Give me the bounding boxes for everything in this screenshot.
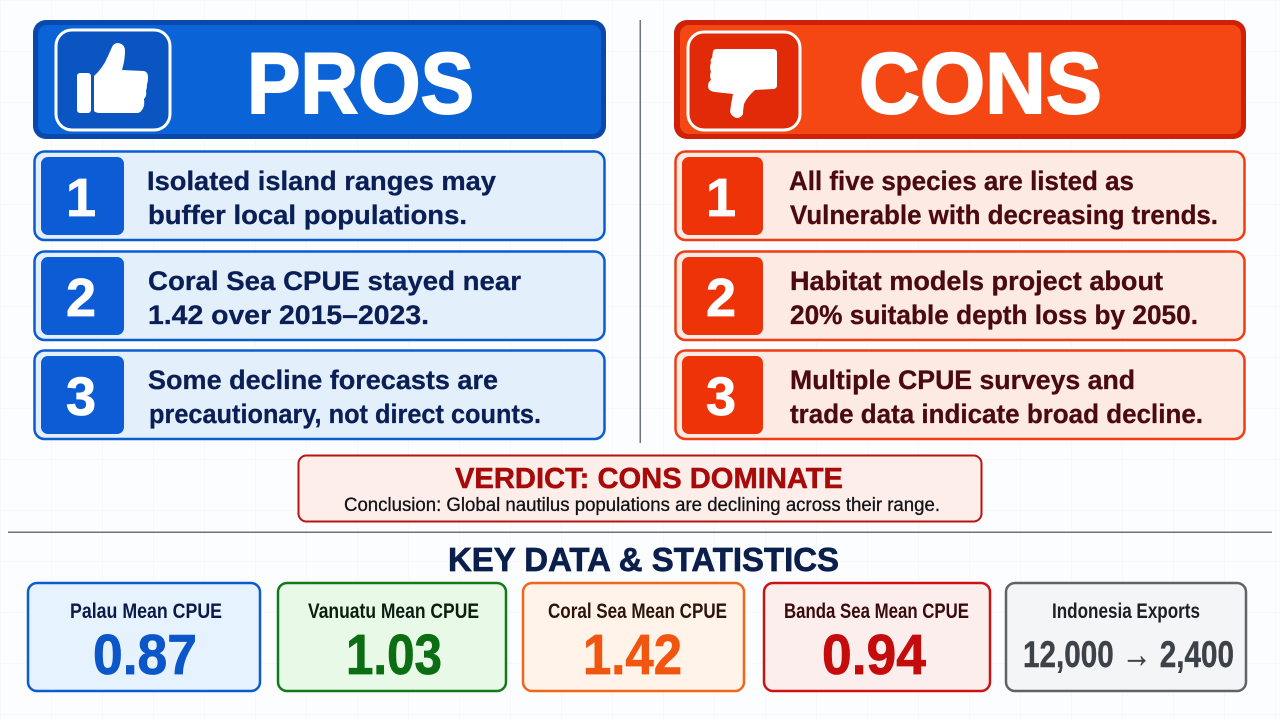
- callout: verdict: [298, 456, 982, 522]
- icon: thumbs up: [56, 30, 170, 130]
- con item 1: 1: [706, 168, 736, 228]
- section divider: [8, 532, 1272, 533]
- stat card: Coral Sea: 1.42: [583, 623, 682, 687]
- con item 2: [676, 252, 1244, 340]
- con item 1: All five species are listed as: [789, 166, 1134, 196]
- pro item 3: Some decline forecasts are: [148, 365, 498, 395]
- pro item 1: buffer local populations.: [148, 200, 467, 230]
- pro item 1: 1: [66, 168, 96, 228]
- pro item 2: Coral Sea CPUE stayed near: [148, 266, 521, 296]
- con item 3: Multiple CPUE surveys and: [790, 365, 1135, 395]
- stat card: Banda Sea: [764, 583, 990, 691]
- callout: verdict: VERDICT: CONS DOMINATE: [455, 463, 843, 495]
- callout: verdict: Conclusion: Global nautilus populations are declining across their range.: [344, 495, 940, 516]
- pro item 1: [34, 152, 604, 240]
- pro item 3: 3: [66, 367, 96, 427]
- icon: thumbs down: [688, 32, 800, 130]
- con item 1: [676, 152, 1244, 240]
- stat card: Banda Sea: 0.94: [822, 623, 926, 687]
- pro item 2: [34, 252, 604, 340]
- heading: cons: CONS: [859, 36, 1102, 132]
- stat card: Indonesia exports: 12,000 → 2,400: [1023, 634, 1234, 675]
- con item 3: trade data indicate broad decline.: [790, 399, 1203, 429]
- con item 2: 2: [706, 268, 736, 328]
- panel: cons header: [674, 20, 1246, 139]
- stat card: Banda Sea: Banda Sea Mean CPUE: [784, 600, 969, 623]
- stat card: Coral Sea: Coral Sea Mean CPUE: [548, 600, 727, 623]
- heading: key data and statistics: KEY DATA & STATISTICS: [448, 541, 839, 578]
- pro item 3: precautionary, not direct counts.: [149, 399, 541, 429]
- con item 2: Habitat models project about: [790, 266, 1163, 296]
- stat card: Indonesia exports: [1006, 583, 1246, 691]
- stat card: Palau: 0.87: [93, 623, 197, 687]
- pro item 2: 1.42 over 2015–2023.: [148, 300, 429, 330]
- pro item 3: [34, 350, 604, 439]
- con item 3: [676, 350, 1244, 439]
- con item 3: 3: [706, 367, 736, 427]
- stat card: Coral Sea: [523, 583, 744, 691]
- pro item 2: 2: [66, 268, 96, 328]
- con item 2: 20% suitable depth loss by 2050.: [790, 300, 1198, 330]
- stat card: Vanuatu: Vanuatu Mean CPUE: [308, 600, 479, 623]
- stat card: Indonesia exports: Indonesia Exports: [1052, 600, 1200, 623]
- stat card: Palau: Palau Mean CPUE: [70, 600, 222, 623]
- stat card: Vanuatu: [278, 583, 506, 691]
- stat card: Palau: [28, 583, 260, 691]
- con item 1: Vulnerable with decreasing trends.: [790, 200, 1218, 230]
- pro item 1: Isolated island ranges may: [147, 166, 496, 196]
- stat card: Vanuatu: 1.03: [346, 623, 442, 687]
- panel: pros header: [33, 20, 606, 139]
- center divider: [640, 20, 641, 443]
- heading: pros: PROS: [247, 36, 474, 132]
